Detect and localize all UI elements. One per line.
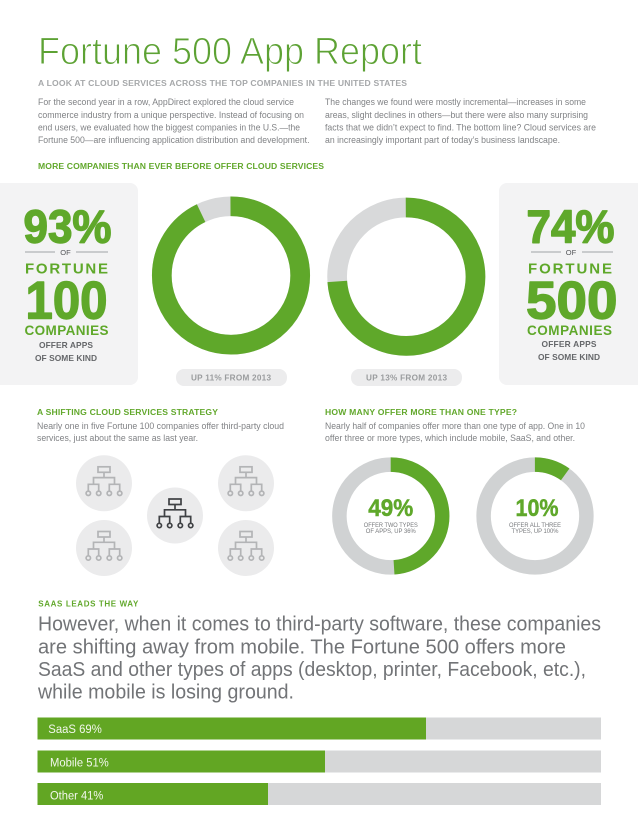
pill: up 13% bbox=[351, 369, 462, 386]
statement text: SaaS and other types of apps (desktop, printer, Facebook, etc.), bbox=[38, 659, 586, 681]
chart: donut 10% bbox=[484, 465, 586, 567]
title: Fortune 500 App Report bbox=[38, 31, 422, 73]
divider with OF: OF bbox=[566, 248, 577, 257]
stat: 93%: 93% bbox=[24, 200, 112, 252]
caption bbox=[538, 339, 600, 362]
statement text: However, when it comes to third-party software, these companies bbox=[38, 614, 601, 636]
statement text bbox=[37, 614, 601, 704]
divider with OF bbox=[25, 248, 108, 257]
chart: donut 74% bbox=[337, 208, 476, 346]
caption bbox=[35, 340, 97, 363]
section heading: more companies: MORE COMPANIES THAN EVER BEFORE OFFER CLOUD SERVICES bbox=[38, 161, 324, 171]
text: more than one type: Nearly half of companies offer more than one type of app. One in 10 bbox=[325, 421, 585, 432]
caption: OFFER APPS bbox=[39, 340, 93, 350]
caption: TYPES, UP 100% bbox=[512, 529, 559, 535]
text: more than one type bbox=[325, 421, 585, 444]
caption: OFFER APPS bbox=[542, 339, 597, 349]
intro text: left column: Fortune 500—are influencing application distribution and development. bbox=[38, 135, 310, 146]
section heading: shifting strategy: A SHIFTING CLOUD SERVICES STRATEGY bbox=[37, 407, 218, 417]
caption bbox=[509, 523, 561, 535]
intro text: right column: an increasingly important part of today’s business landscape. bbox=[325, 135, 560, 146]
statement text: while mobile is losing ground. bbox=[37, 682, 294, 704]
text: shifting strategy bbox=[37, 421, 284, 444]
bar: Mobile 51%: Mobile 51% bbox=[50, 757, 109, 769]
bar: SaaS 69%: SaaS 69% bbox=[48, 724, 102, 736]
chart: donut 49% bbox=[339, 465, 442, 567]
caption: OFFER ALL THREE bbox=[509, 523, 561, 529]
pill: up 11% bbox=[176, 369, 287, 386]
stat: 500: 500 bbox=[526, 272, 618, 330]
icon: network bottom right bbox=[218, 520, 274, 576]
pill: up 11%: UP 11% FROM 2013 bbox=[191, 374, 271, 382]
panel: Fortune 100 stat bbox=[0, 183, 138, 385]
label: COMPANIES: COMPANIES bbox=[24, 323, 108, 338]
section heading: more than one type: HOW MANY OFFER MORE THAN ONE TYPE? bbox=[325, 407, 517, 417]
intro text: left column bbox=[38, 97, 310, 146]
caption: OF APPS, UP 36% bbox=[366, 529, 416, 535]
bar: Other 41% bbox=[38, 783, 601, 805]
subtitle: A LOOK AT CLOUD SERVICES ACROSS THE TOP COMPANIES IN THE UNITED STATES bbox=[38, 78, 407, 88]
text: more than one type: offer three or more types, which include mobile, SaaS, and other. bbox=[325, 433, 575, 444]
divider with OF: OF bbox=[60, 248, 71, 257]
value: 49% bbox=[368, 495, 413, 522]
intro text: right column: facts that we didn’t expect to find. The bottom line? Cloud services are bbox=[325, 122, 596, 134]
panel: Fortune 500 stat bbox=[499, 183, 638, 385]
intro text: left column: commerce industry from a unique perspective. Instead of focusing on bbox=[38, 110, 304, 121]
label: FORTUNE: FORTUNE bbox=[528, 260, 612, 278]
intro text: right column bbox=[325, 97, 596, 146]
stat: 74%: 74% bbox=[526, 200, 614, 252]
text: shifting strategy: services, just about the same as last year. bbox=[37, 433, 198, 444]
label: FORTUNE: FORTUNE bbox=[25, 260, 108, 278]
value: 10% bbox=[516, 495, 558, 522]
bar: Other 41%: Other 41% bbox=[50, 790, 103, 802]
icon: network top right bbox=[218, 455, 274, 511]
intro text: left column: end users, we evaluated how the biggest companies in the U.S.—the bbox=[38, 122, 300, 134]
caption bbox=[364, 523, 418, 535]
text: shifting strategy: Nearly one in five Fortune 100 companies offer third-party cloud bbox=[37, 421, 284, 432]
caption: OFFER TWO TYPES bbox=[364, 523, 418, 529]
section heading: saas leads: SAAS LEADS THE WAY bbox=[38, 600, 139, 609]
label: COMPANIES: COMPANIES bbox=[527, 323, 612, 338]
divider with OF bbox=[531, 248, 613, 257]
icon: network bottom left bbox=[76, 520, 132, 576]
icon: network top left bbox=[76, 455, 132, 511]
chart: donut 93% bbox=[162, 206, 300, 345]
intro text: left column: For the second year in a row, AppDirect explored the cloud service bbox=[38, 97, 294, 108]
bar: SaaS 69% bbox=[38, 718, 601, 740]
intro text: right column: The changes we found were mostly incremental—increases in some bbox=[325, 97, 586, 108]
icon: network centre highlighted bbox=[147, 488, 203, 544]
bar: Mobile 51% bbox=[38, 750, 601, 772]
stat: 100: 100 bbox=[26, 272, 108, 330]
caption: OF SOME KIND bbox=[538, 352, 600, 362]
statement text: are shifting away from mobile. The Fortune 500 offers more bbox=[38, 636, 566, 658]
intro text: right column: areas, slight declines in others—but there were also many surprising bbox=[325, 110, 588, 121]
caption: OF SOME KIND bbox=[35, 353, 97, 363]
pill: up 13%: UP 13% FROM 2013 bbox=[366, 374, 447, 382]
